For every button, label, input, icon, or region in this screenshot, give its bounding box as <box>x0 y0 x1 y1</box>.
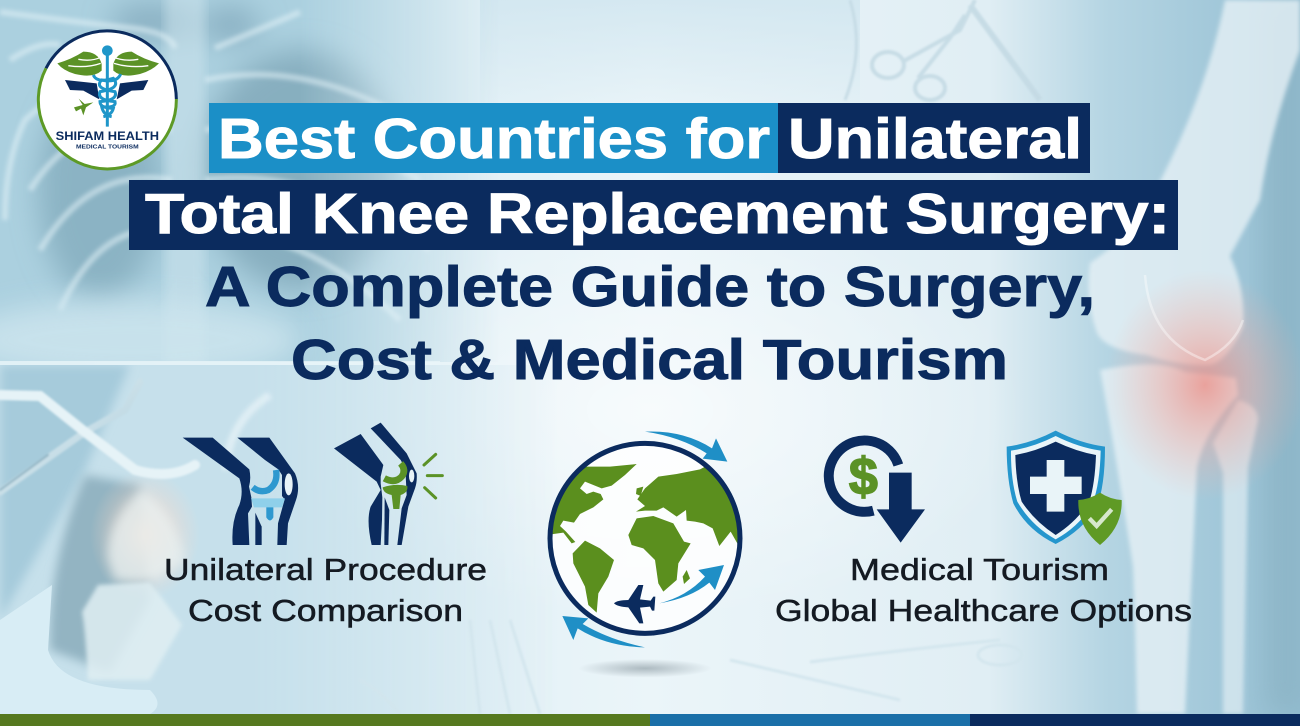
logo wings <box>57 52 159 76</box>
continents <box>552 464 738 612</box>
logo tagline: MEDICAL TOURISM <box>76 144 139 150</box>
logo wing feathers <box>68 57 148 67</box>
plane <box>614 585 655 623</box>
title line 2 navy highlight: Total Knee Replacement Surgery: <box>145 182 1170 246</box>
icon: knee joint pain <box>334 423 442 545</box>
title <box>129 103 1178 319</box>
label: unilateral procedure: Cost Comparison <box>188 593 463 628</box>
label: unilateral procedure <box>164 552 487 628</box>
background: instruments top right <box>845 0 1040 100</box>
verified badge <box>1078 493 1122 545</box>
label: medical tourism: Global Healthcare Options <box>775 593 1192 628</box>
background: surgical forceps left <box>0 382 195 492</box>
label: medical tourism: Medical Tourism <box>850 552 1109 587</box>
fibula <box>1213 400 1258 714</box>
icon: cost reduction <box>829 440 925 543</box>
pain lines <box>424 454 442 498</box>
background: instruments bottom centre <box>360 620 1022 714</box>
title line 4: Cost & Medical Tourism <box>291 328 1008 392</box>
footer colour bar <box>0 714 1300 726</box>
background: chest x-ray <box>0 0 500 380</box>
icon: cost reduction: $ <box>849 447 878 505</box>
logo caduceus <box>93 45 121 127</box>
panel divider <box>0 361 440 365</box>
icon: globe with flight arrows <box>547 432 757 678</box>
title line 1 navy highlight: Unilateral <box>788 107 1082 171</box>
background: right leg x-ray <box>1089 0 1300 714</box>
logo name: SHIFAM HEALTH <box>56 129 159 143</box>
title line 3: A Complete Guide to Surgery, <box>205 255 1095 319</box>
icon: health shield <box>1007 431 1122 545</box>
title line 1 blue highlight: Best Countries for <box>218 107 770 171</box>
label: unilateral procedure: Unilateral Procedure <box>164 552 487 587</box>
icon: knee implant <box>183 438 298 545</box>
label: medical tourism <box>775 552 1192 628</box>
background: surgical knee photo <box>0 365 498 714</box>
tibia <box>1100 364 1238 714</box>
inflammation glow <box>1105 270 1300 500</box>
femur <box>1089 0 1300 365</box>
arrows <box>562 432 727 647</box>
logo <box>38 30 176 169</box>
